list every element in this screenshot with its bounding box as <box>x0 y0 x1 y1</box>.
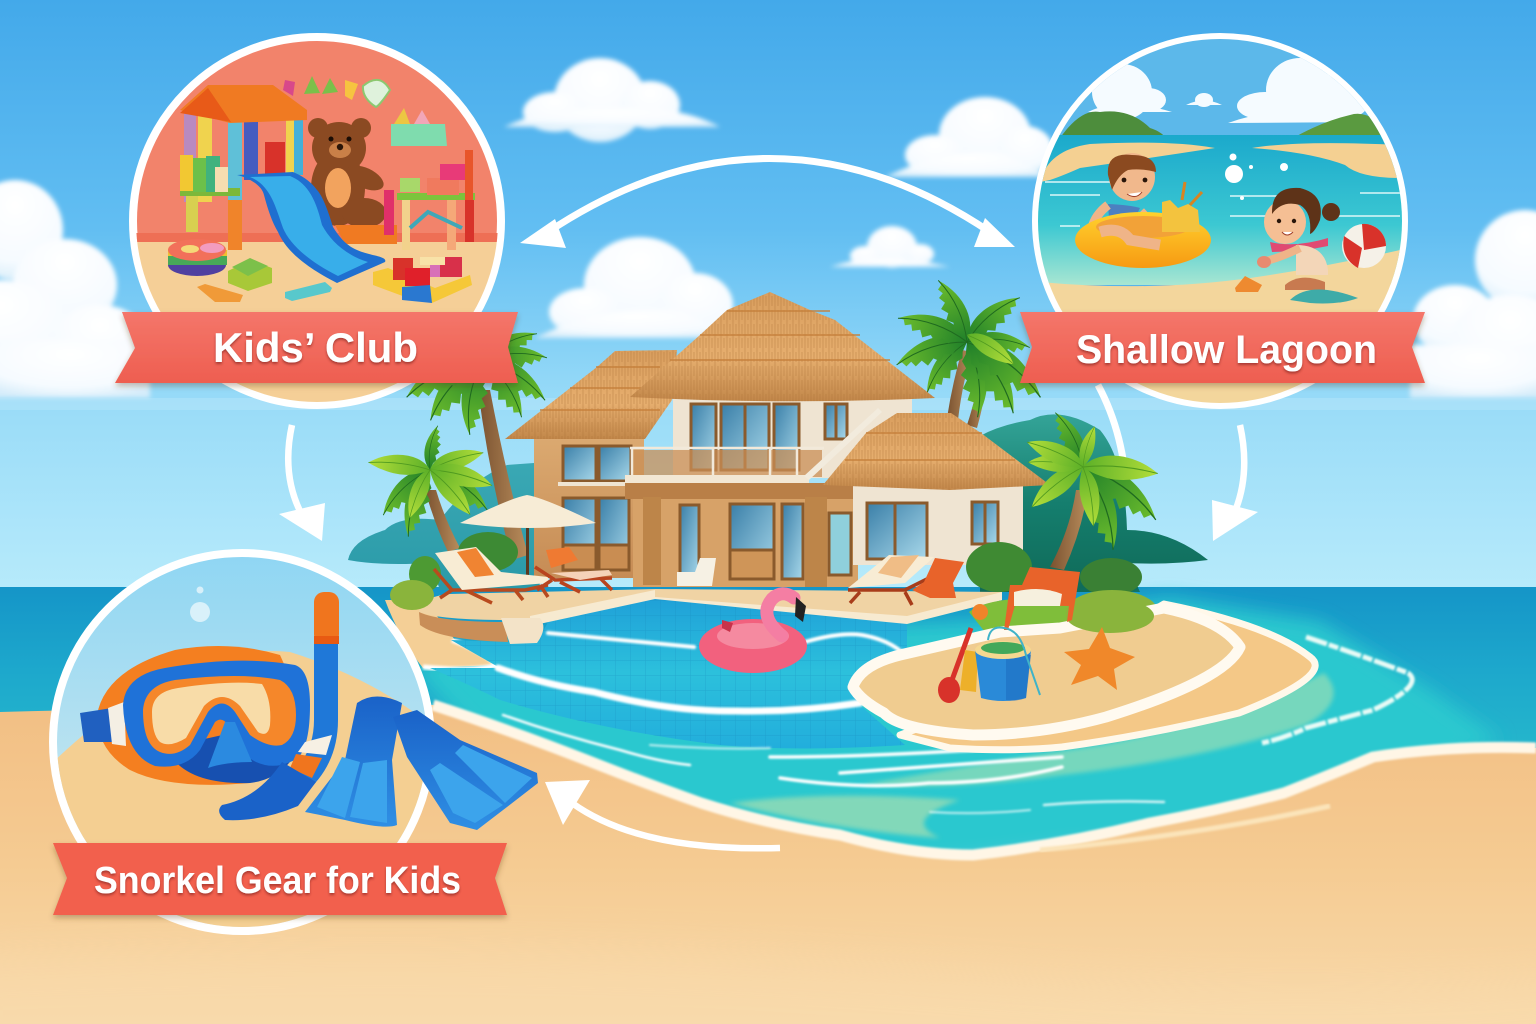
sky background <box>0 0 1536 600</box>
palm: right foreground <box>1024 407 1166 570</box>
lagoon clouds <box>1088 58 1372 123</box>
green block <box>228 258 272 291</box>
sea <box>0 587 1536 827</box>
umbrella <box>460 495 596 580</box>
sand lobe under terrace <box>385 600 500 668</box>
snorkel tube <box>219 592 339 820</box>
bush over sand <box>1066 599 1154 633</box>
sand island <box>853 608 1240 735</box>
pool foam lines <box>498 633 1164 813</box>
diagonal trim <box>804 408 882 480</box>
mask orange back <box>97 646 300 785</box>
lagoon shallows <box>410 598 1500 870</box>
roof: main thatch <box>630 292 935 401</box>
lens orange <box>143 676 296 754</box>
orange beach chair <box>1004 567 1080 630</box>
lobe foam <box>423 640 498 669</box>
panel: snorkel gear <box>50 553 538 940</box>
toy shovel <box>938 628 971 703</box>
mask strap <box>80 702 126 746</box>
circle frame <box>1036 37 1404 405</box>
cloud: small centre <box>830 226 950 268</box>
beach foam edge <box>433 705 1536 855</box>
orange chair behind lounger <box>912 558 964 598</box>
banner: kids club <box>115 312 518 383</box>
cloud: top centre <box>504 58 720 142</box>
deck lip <box>530 590 1002 626</box>
far left island <box>1062 111 1163 135</box>
columns <box>643 497 827 587</box>
arrow: lagoon downward <box>1212 425 1258 541</box>
wall shelf <box>391 108 447 146</box>
palm: left foreground <box>367 424 495 552</box>
bubbles <box>1225 154 1288 200</box>
pool deck <box>419 589 1002 622</box>
white chair on terrace <box>677 558 716 586</box>
centre doors <box>680 504 803 579</box>
lounger: second left <box>535 547 612 592</box>
banner: shallow lagoon <box>1020 312 1425 383</box>
building blocks <box>373 257 472 303</box>
sand highlight streak <box>1040 806 1330 850</box>
arrow: kids club to snorkel <box>279 425 325 541</box>
orange plate <box>197 284 243 302</box>
far ragged foam <box>1262 637 1412 743</box>
cloud: behind house <box>535 237 735 338</box>
palm: back left <box>399 323 553 560</box>
ribbon <box>53 843 507 915</box>
green wet patch <box>730 796 960 838</box>
hills: left teal <box>348 463 540 590</box>
toy bucket <box>975 628 1040 701</box>
lens glass <box>152 683 270 744</box>
left wing upper windows <box>563 446 631 481</box>
horizon haze band <box>0 398 1536 410</box>
bubbles <box>190 586 210 622</box>
playhouse <box>180 85 307 250</box>
fin: left <box>305 696 402 827</box>
step under teddy <box>335 225 397 244</box>
lounger: far left <box>434 547 548 603</box>
skirting <box>130 233 510 242</box>
floor <box>130 240 510 410</box>
light green shallows <box>860 673 1334 786</box>
teddy bear <box>308 118 387 228</box>
girl <box>1235 188 1358 303</box>
left wing sill <box>558 482 634 486</box>
right beach <box>1252 143 1400 178</box>
right windows <box>829 502 998 575</box>
island grass <box>969 590 1158 634</box>
mask dark skirt <box>170 720 306 783</box>
cloud: far left <box>0 180 150 398</box>
left beach <box>1040 143 1215 182</box>
balcony slab <box>625 475 860 499</box>
arrow: beach to snorkel <box>545 780 780 848</box>
scene <box>58 586 423 927</box>
banner: snorkel gear <box>53 843 507 915</box>
teal plate <box>285 282 332 301</box>
lounger: right <box>848 555 935 605</box>
beach dune <box>58 651 423 927</box>
right wall <box>853 485 1023 565</box>
circle frame <box>133 37 501 405</box>
bushes <box>390 532 1142 610</box>
flamingo float <box>699 594 807 673</box>
beach ball <box>1342 224 1386 268</box>
wall shapes <box>283 76 390 107</box>
palm: back right <box>892 275 1051 428</box>
shelf with books <box>180 155 240 196</box>
roof: right thatch <box>823 413 1050 490</box>
fin: right <box>393 710 538 830</box>
orange ball on grass <box>972 604 988 620</box>
label: Kids’ Club <box>213 324 418 371</box>
label: Snorkel Gear for Kids <box>94 860 461 902</box>
panel: shallow lagoon <box>1030 30 1410 410</box>
far right island <box>1298 114 1384 141</box>
circle frame <box>53 553 431 931</box>
upper windows <box>691 404 847 470</box>
brick terrace <box>419 612 508 642</box>
sky <box>1059 39 1381 136</box>
roof: left thatch <box>505 350 677 439</box>
cloud: upper right of centre <box>885 97 1053 177</box>
slide <box>237 172 385 283</box>
left wing lower windows <box>563 498 629 570</box>
lower sand <box>1040 250 1400 410</box>
mask <box>80 646 310 785</box>
lagoon water <box>1030 135 1410 285</box>
ribbon <box>1020 312 1425 383</box>
ribbon <box>115 312 518 383</box>
label: Shallow Lagoon <box>1076 328 1377 372</box>
scene <box>130 76 510 410</box>
starfish <box>1064 627 1135 690</box>
hills: right jungle <box>980 414 1208 592</box>
arrow: lagoon arc behind house <box>1098 385 1127 500</box>
bottom sand shading <box>0 948 1536 1024</box>
boy with float <box>1075 153 1211 268</box>
main beach sand <box>0 705 1536 1024</box>
panel: kids club <box>130 37 510 410</box>
kids table <box>384 150 475 250</box>
terrace steps <box>501 618 543 644</box>
balcony railing <box>630 448 824 477</box>
arrow: top double arc <box>520 158 1015 248</box>
cloud: far right <box>1410 210 1536 398</box>
house <box>505 292 1050 587</box>
lower centre wall <box>633 483 858 587</box>
yellow mould <box>960 650 978 692</box>
nose piece <box>208 722 252 768</box>
mask frame <box>123 661 310 767</box>
stacking rings <box>168 239 227 276</box>
outer wet sand <box>900 604 1315 750</box>
water ripples <box>1045 182 1400 226</box>
upper storey wall <box>673 395 912 478</box>
scene <box>1030 30 1410 410</box>
left wing wall <box>534 438 644 578</box>
pool water <box>430 597 907 748</box>
